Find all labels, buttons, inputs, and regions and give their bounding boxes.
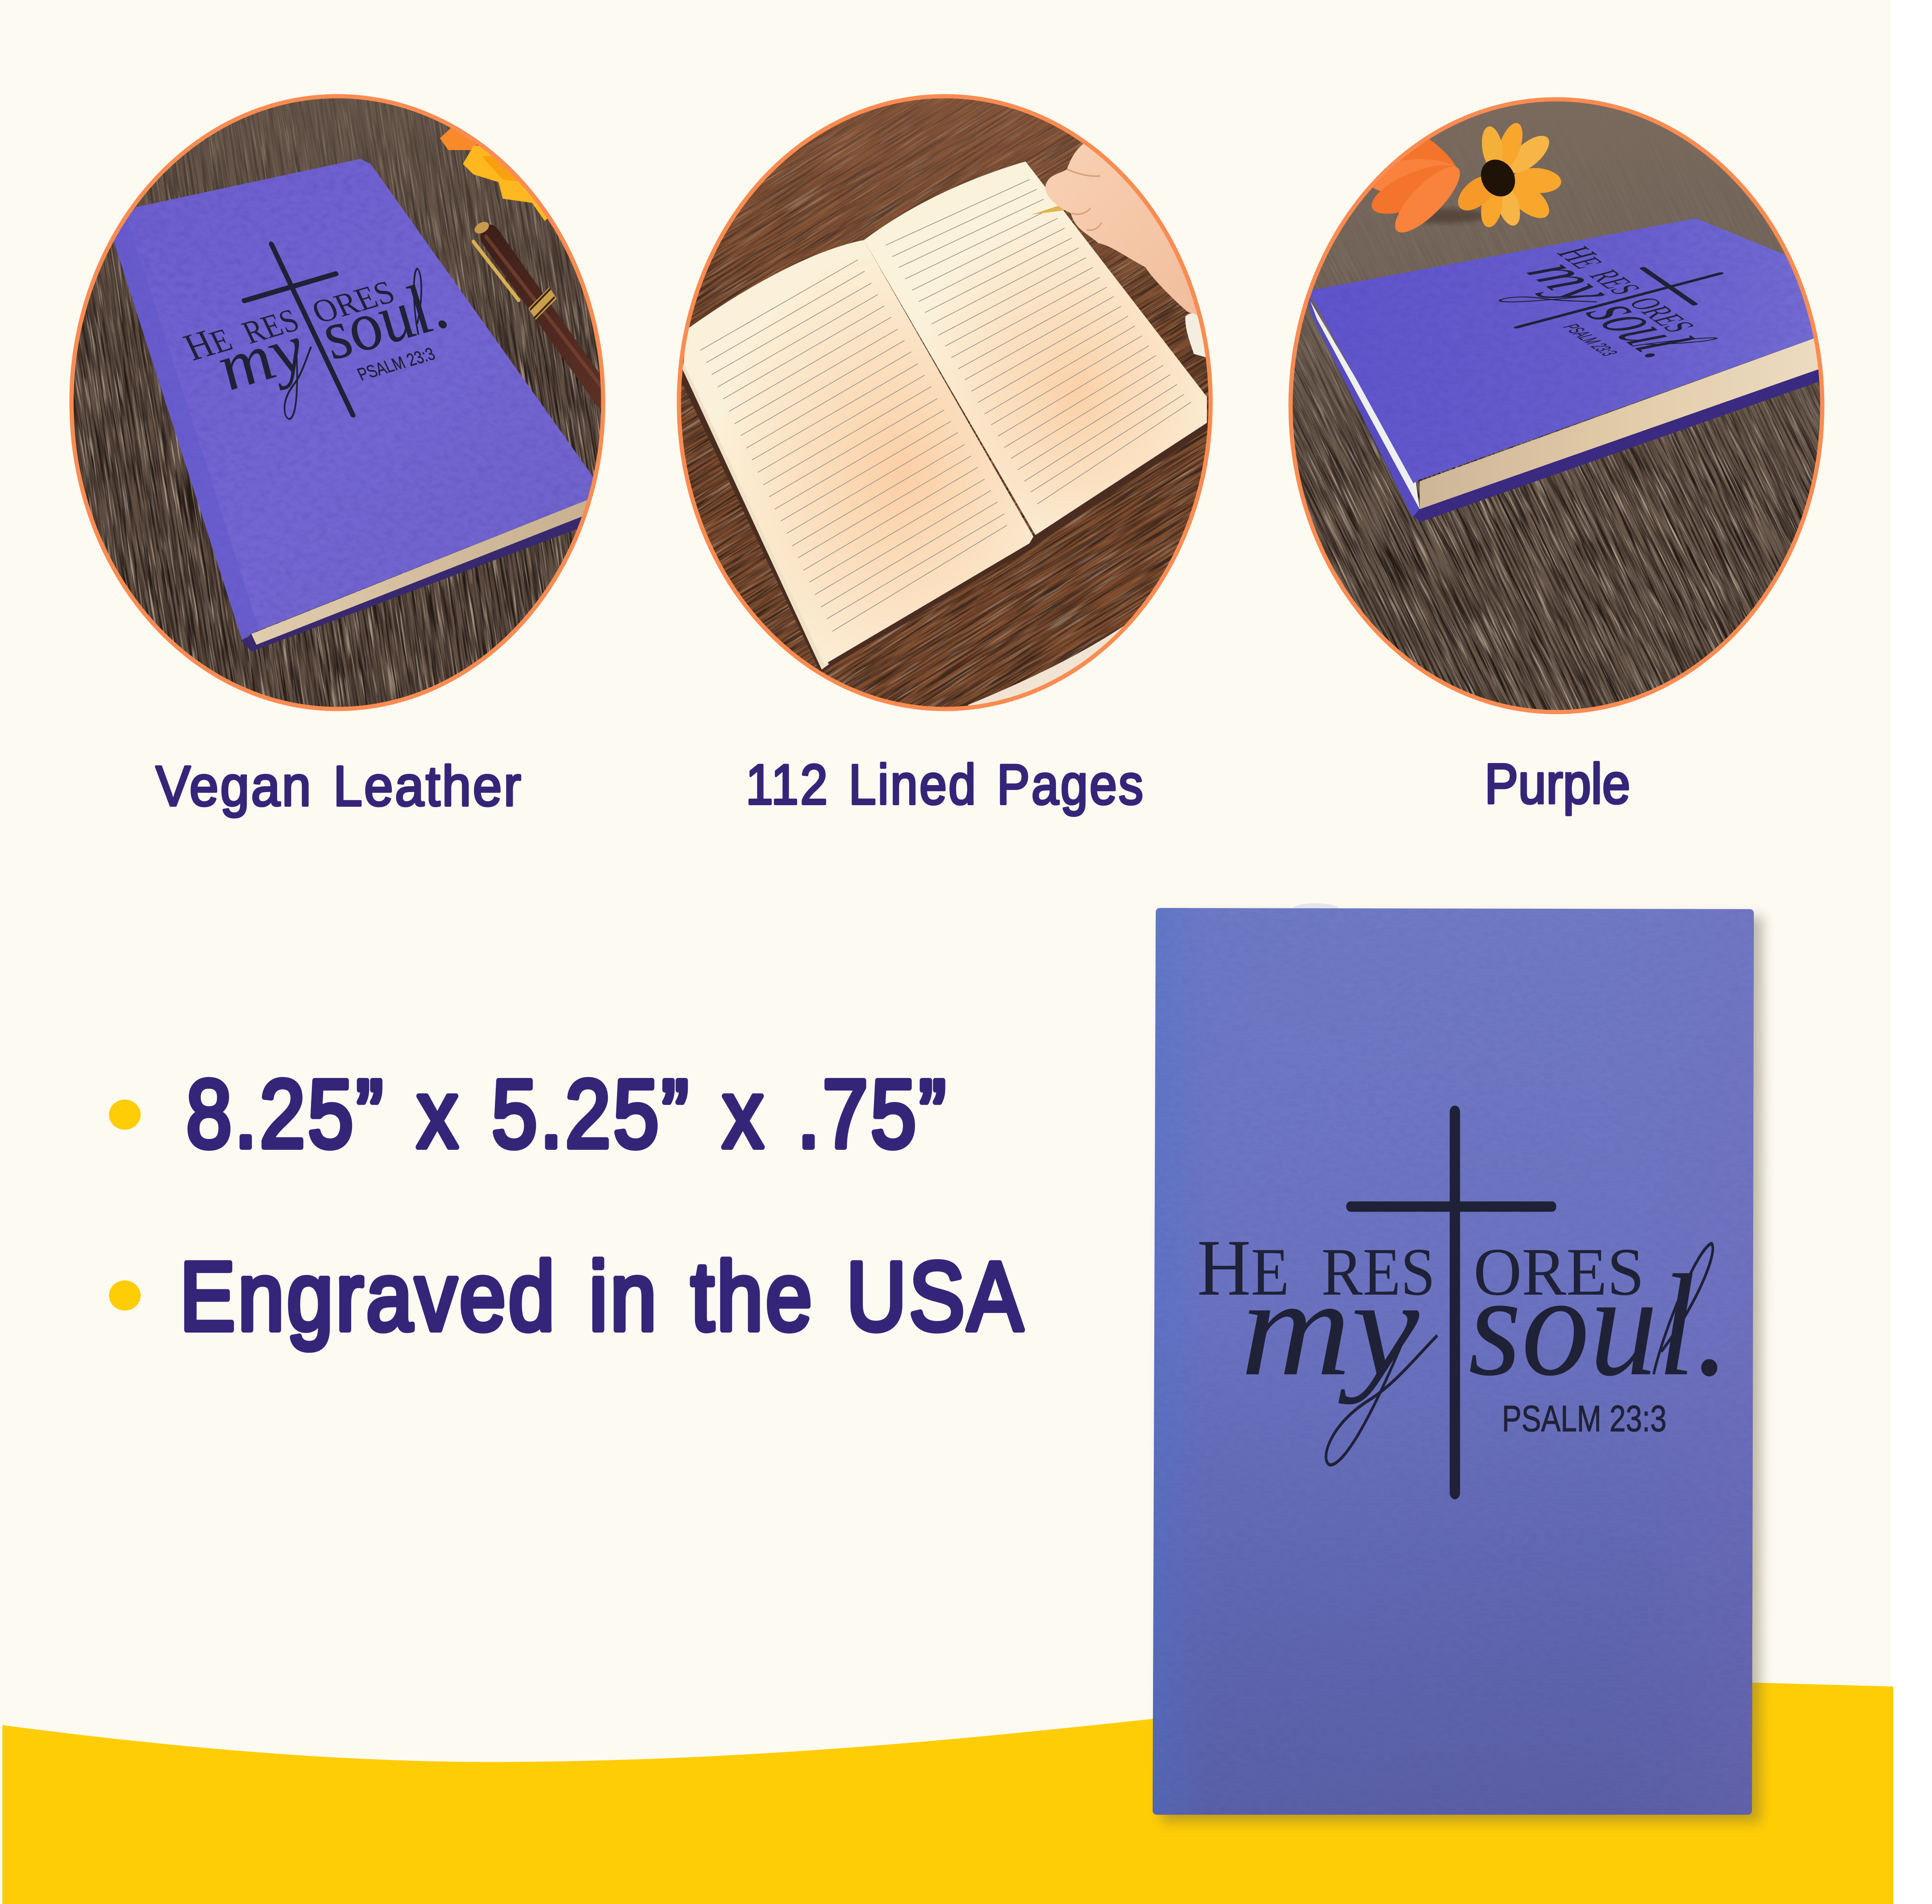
engraved verse on angled cover: RES	[236, 302, 304, 351]
photo frame	[679, 96, 1211, 709]
engraved verse: my	[1241, 1250, 1420, 1405]
photo frame	[1291, 99, 1822, 712]
engraved verse: HE	[1197, 1223, 1289, 1312]
engraved verse on angled cover: soul.	[306, 267, 460, 374]
yellow wave footer	[2, 1682, 1893, 1904]
engraved verse: soul.	[1468, 1244, 1730, 1406]
panel: flat notebook cover	[1153, 903, 1763, 1822]
cross	[1346, 1105, 1556, 1499]
panel: lined pages photo	[357, 0, 1529, 991]
icon: wooden pen	[473, 219, 603, 397]
engraved verse: RES	[1321, 1234, 1435, 1310]
engraved verse on angled cover: ORES	[306, 274, 400, 330]
engraved verse on angled cover: HE	[177, 316, 238, 369]
engraved verse on low angle cover: HE	[1546, 243, 1617, 272]
icon: orange and yellow flowers	[1366, 109, 1562, 243]
caption: purple: Purple	[1485, 752, 1630, 816]
engraved verse on angled cover: my	[203, 311, 318, 404]
panel: vegan leather photo	[70, 94, 605, 711]
panel: purple notebook photo	[989, 0, 1932, 974]
icon: sunflower corner	[440, 128, 547, 221]
engraved verse	[1197, 1105, 1730, 1499]
open notebook with ruled lines	[681, 162, 1210, 673]
engraved verse on low angle cover: ORES	[1619, 294, 1704, 335]
engraved verse: PSALM 23:3	[1502, 1398, 1667, 1439]
notebook angled cover	[111, 159, 594, 651]
engraved verse on angled cover	[152, 204, 480, 452]
caption: lined pages: 112 Lined Pages	[746, 753, 1145, 816]
engraved verse on low angle cover: my	[1509, 255, 1637, 308]
caption: vegan leather: Vegan Leather	[156, 755, 523, 818]
bullet: dimensions: 8.25” x 5.25” x .75”	[186, 1060, 949, 1168]
engraved verse on angled cover: PSALM 23:3	[354, 344, 438, 384]
bullet: engraved in the USA: Engraved in the USA	[180, 1242, 1026, 1351]
engraved verse: ORES	[1473, 1234, 1644, 1310]
engraved verse on low angle cover: RES	[1580, 267, 1650, 298]
knit blanket	[968, 607, 1170, 720]
hand holding pen	[1031, 139, 1209, 358]
engraved verse on low angle cover: soul.	[1567, 294, 1721, 364]
photo frame	[71, 96, 603, 709]
engraved verse on low angle cover: PSALM 23:3	[1558, 322, 1623, 358]
notebook low angle cover	[1308, 218, 1824, 522]
engraved verse on low angle cover	[1447, 226, 1794, 377]
